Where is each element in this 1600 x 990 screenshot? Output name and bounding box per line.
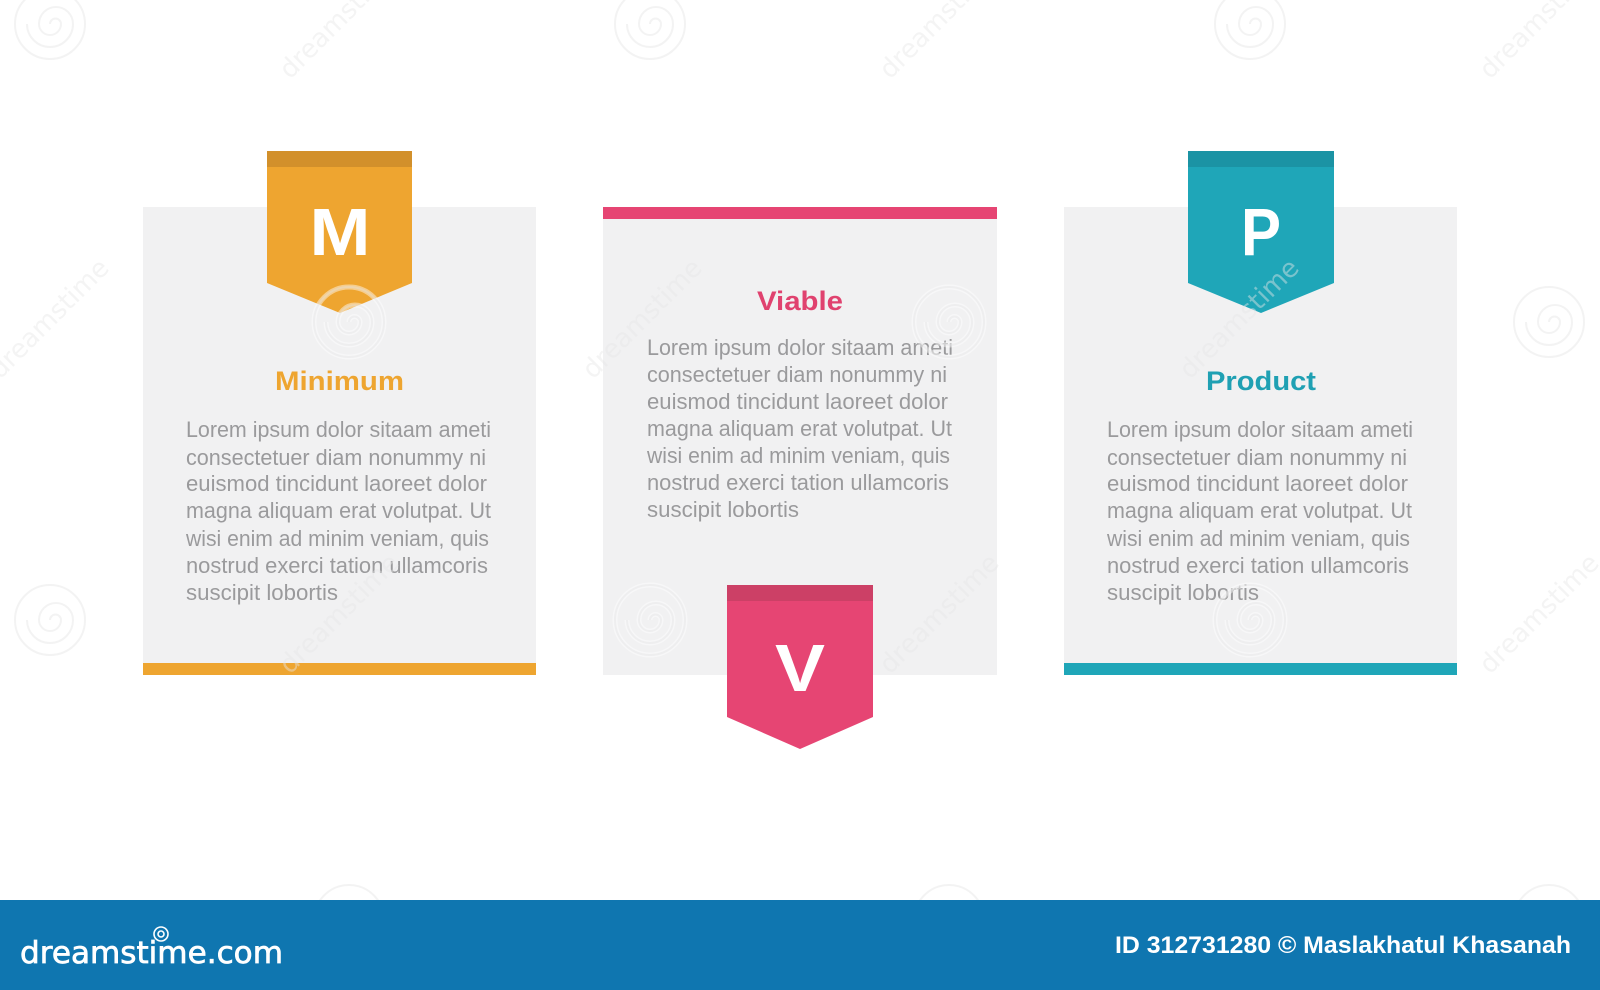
heading: Product: Product <box>1206 366 1316 396</box>
watermark pattern: dreamstime <box>577 253 708 385</box>
text block: Minimum body: wisi enim ad minim veniam, quis <box>185 526 489 551</box>
icon: P ribbon badge <box>1188 151 1334 313</box>
heading: Minimum: Minimum <box>275 366 404 396</box>
text block: Minimum body: euismod tincidunt laoreet dolor <box>186 471 487 496</box>
text block: Viable body <box>646 335 953 522</box>
text block: Viable body: suscipit lobortis <box>647 497 799 522</box>
icon: P ribbon badge: P <box>1241 195 1281 270</box>
text block: Product body: magna aliquam erat volutpat. Ut <box>1107 498 1412 523</box>
watermark pattern: dreamstime <box>1174 253 1305 385</box>
text block: Viable body: nostrud exerci tation ullamcoris <box>647 470 949 495</box>
text block: Product body: wisi enim ad minim veniam, quis <box>1106 526 1410 551</box>
text block: Product body: nostrud exerci tation ullamcoris <box>1107 553 1409 578</box>
bottom accent bar <box>143 663 536 675</box>
text block: Minimum body <box>185 417 491 605</box>
text block: Product body: euismod tincidunt laoreet dolor <box>1107 471 1408 496</box>
watermark pattern: dreamstime <box>274 548 405 680</box>
credit line: ID 312731280 © Maslakhatul Khasanah <box>1115 932 1571 959</box>
text block: Product body: consectetuer diam nonummy ni <box>1107 445 1407 470</box>
text block: Viable body: magna aliquam erat volutpat. Ut <box>647 416 952 441</box>
text block: Minimum body: consectetuer diam nonummy ni <box>186 445 486 470</box>
panel: Minimum <box>143 151 536 675</box>
text block: Viable body: wisi enim ad minim veniam, quis <box>646 443 950 468</box>
card background <box>143 207 536 675</box>
text block: Viable body: euismod tincidunt laoreet dolor <box>647 389 948 414</box>
icon: M ribbon badge: M <box>310 195 370 270</box>
text block: Viable body: consectetuer diam nonummy ni <box>647 362 947 387</box>
icon: M ribbon badge <box>267 151 412 313</box>
text block: Product body <box>1106 417 1413 605</box>
text block: Minimum body: magna aliquam erat volutpat. Ut <box>186 498 491 523</box>
panel: Product <box>1064 151 1457 675</box>
card background <box>603 207 997 675</box>
icon: V ribbon badge: V <box>775 631 825 706</box>
icon: V ribbon badge <box>727 585 873 749</box>
footer bar <box>0 900 1600 990</box>
top accent bar <box>603 207 997 219</box>
text block: Product body: suscipit lobortis <box>1107 580 1259 605</box>
card background <box>1064 207 1457 675</box>
text block: Product body: Lorem ipsum dolor sitaam ameti <box>1107 417 1413 442</box>
watermark pattern: dreamstime <box>874 548 1005 680</box>
text block: Minimum body: nostrud exerci tation ullamcoris <box>186 553 488 578</box>
text block: Minimum body: Lorem ipsum dolor sitaam ameti <box>186 417 491 442</box>
logo: dreamstime.com: dreamstime.com <box>20 936 283 971</box>
panel: Viable <box>603 207 997 749</box>
text block: Viable body: Lorem ipsum dolor sitaam ameti <box>647 335 953 360</box>
text block: Minimum body: suscipit lobortis <box>186 580 338 605</box>
bottom accent bar <box>1064 663 1457 675</box>
heading: Viable: Viable <box>757 286 843 316</box>
